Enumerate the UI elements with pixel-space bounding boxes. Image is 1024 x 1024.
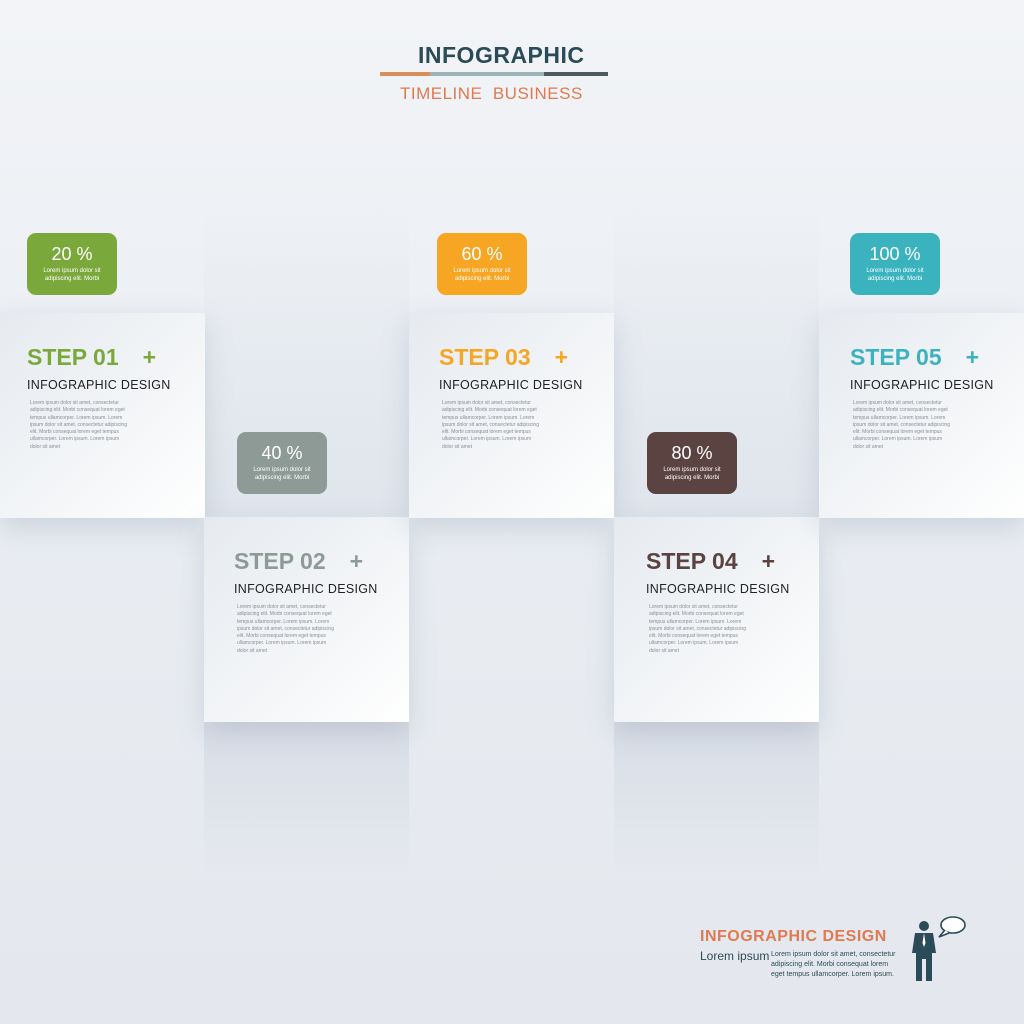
badge 60%: adipiscing elit. Morbi (455, 276, 509, 282)
step 5 card: Lorem ipsum dolor sit amet, consectetur adipiscing elit. Morbi consequat lorem eget tempus ullamcorper. Lorem ipsum. Lorem ipsum dolor sit amet, consectetur adipiscing elit. Morbi consequat lorem eget tempus ullamcorper. Lorem ipsum. Lorem ipsum dolor sit amet (853, 400, 950, 450)
step 2 card (204, 517, 409, 722)
step 4 card: INFOGRAPHIC DESIGN (646, 582, 790, 596)
footer block: Lorem ipsum (700, 949, 769, 963)
badge 60% (437, 233, 527, 295)
footer block: INFOGRAPHIC DESIGN (700, 928, 887, 945)
badge 100%: 100 % (869, 244, 921, 264)
badge 40%: adipiscing elit. Morbi (255, 475, 309, 481)
badge 60%: Lorem ipsum dolor sit (453, 268, 511, 274)
badge 80%: Lorem ipsum dolor sit (663, 467, 721, 473)
step 2 card: STEP 02 + (234, 548, 363, 574)
step 3 card: INFOGRAPHIC DESIGN (439, 378, 583, 392)
step 1 card (0, 313, 205, 518)
footer block: Lorem ipsum dolor sit amet, consectetur adipiscing elit. Morbi consequat lorem eget tempus ullamcorper. Lorem ipsum. (771, 951, 896, 978)
step 4 card (614, 517, 819, 722)
badge 40% (237, 432, 327, 494)
step 1 card: STEP 01 + (27, 344, 156, 370)
badge 80%: 80 % (671, 443, 713, 463)
icon: businessman with speech bubble (912, 916, 966, 981)
badge 100% (850, 233, 940, 295)
step 4 card: STEP 04 + (646, 548, 775, 574)
step 1 card: Lorem ipsum dolor sit amet, consectetur adipiscing elit. Morbi consequat lorem eget tempus ullamcorper. Lorem ipsum. Lorem ipsum dolor sit amet, consectetur adipiscing elit. Morbi consequat lorem eget tempus ullamcorper. Lorem ipsum. Lorem ipsum dolor sit amet (30, 400, 127, 450)
badge 20% (27, 233, 117, 295)
badge 100%: Lorem ipsum dolor sit (866, 268, 924, 274)
step 2 card: Lorem ipsum dolor sit amet, consectetur adipiscing elit. Morbi consequat lorem eget tempus ullamcorper. Lorem ipsum. Lorem ipsum dolor sit amet, consectetur adipiscing elit. Morbi consequat lorem eget tempus ullamcorper. Lorem ipsum. Lorem ipsum dolor sit amet (237, 604, 334, 654)
step 5 card: INFOGRAPHIC DESIGN (850, 378, 994, 392)
badge 80%: adipiscing elit. Morbi (665, 475, 719, 481)
title (380, 42, 608, 103)
badge 100%: adipiscing elit. Morbi (868, 276, 922, 282)
badge 60%: 60 % (461, 244, 503, 264)
column shading (204, 200, 409, 517)
title: INFOGRAPHIC (418, 42, 584, 68)
step 1 card: INFOGRAPHIC DESIGN (27, 378, 171, 392)
step 3 card: Lorem ipsum dolor sit amet, consectetur adipiscing elit. Morbi consequat lorem eget tempus ullamcorper. Lorem ipsum. Lorem ipsum dolor sit amet, consectetur adipiscing elit. Morbi consequat lorem eget tempus ullamcorper. Lorem ipsum. Lorem ipsum dolor sit amet (442, 400, 539, 450)
badge 40%: Lorem ipsum dolor sit (253, 467, 311, 473)
footer block (700, 916, 966, 981)
step 3 card (409, 313, 614, 518)
badge 20%: 20 % (51, 244, 93, 264)
step 5 card (819, 313, 1024, 518)
step 2 card: INFOGRAPHIC DESIGN (234, 582, 378, 596)
badge 20%: adipiscing elit. Morbi (45, 276, 99, 282)
badge 20%: Lorem ipsum dolor sit (43, 268, 101, 274)
step 5 card: STEP 05 + (850, 344, 979, 370)
badge 80% (647, 432, 737, 494)
step 4 card: Lorem ipsum dolor sit amet, consectetur adipiscing elit. Morbi consequat lorem eget tempus ullamcorper. Lorem ipsum. Lorem ipsum dolor sit amet, consectetur adipiscing elit. Morbi consequat lorem eget tempus ullamcorper. Lorem ipsum. Lorem ipsum dolor sit amet (649, 604, 746, 654)
badge 40%: 40 % (261, 443, 303, 463)
step 3 card: STEP 03 + (439, 344, 568, 370)
title: TIMELINE BUSINESS (400, 84, 583, 103)
